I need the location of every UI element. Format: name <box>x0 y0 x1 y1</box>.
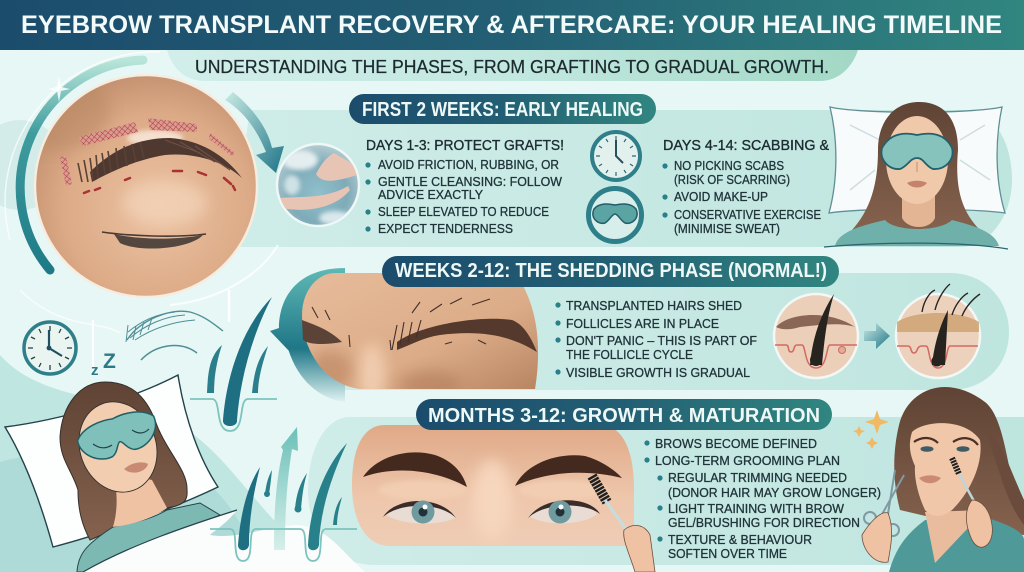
text block: days 1-3: GENTLE CLEANSING: FOLLOW <box>378 174 563 189</box>
pillow <box>5 375 218 547</box>
text block: growth bullets: (DONOR HAIR MAY GROW LONGER) <box>668 485 881 500</box>
brows and eyes <box>914 438 978 445</box>
text block: days 1-3: DAYS 1-3: PROTECT GRAFTS! <box>366 138 564 154</box>
closed eye <box>102 232 206 249</box>
arrow: to water circle <box>225 92 284 173</box>
lips <box>919 475 941 483</box>
illustration: hair regrowth with arrow <box>210 427 357 561</box>
text block: days 4-14: AVOID MAKE-UP <box>674 189 768 204</box>
blanket <box>83 510 365 572</box>
text block: shedding bullets <box>555 298 757 380</box>
text block: days 4-14: (MINIMISE SWEAT) <box>674 221 780 236</box>
text block: days 1-3: ADVICE EXACTLY <box>378 187 483 202</box>
photo: shedding brows <box>302 273 538 389</box>
icon: water and hands <box>277 144 360 226</box>
text block: days 4-14: NO PICKING SCABS <box>674 158 784 173</box>
wand and hand <box>592 476 655 572</box>
text block: growth bullets: SOFTEN OVER TIME <box>668 546 787 561</box>
icon: brow sketch <box>126 311 223 360</box>
illustration: hair follicle growth <box>190 297 277 431</box>
section heading: first 2 weeks: FIRST 2 WEEKS: EARLY HEALING <box>362 99 643 121</box>
icon: clock <box>592 132 640 180</box>
hair <box>852 102 980 230</box>
neck <box>112 470 167 527</box>
shirt <box>77 503 220 572</box>
brow <box>78 138 242 182</box>
timeline arcs around eye photo <box>5 52 278 372</box>
text block: growth bullets: LIGHT TRAINING WITH BROW <box>668 501 845 516</box>
lips <box>907 181 927 188</box>
diagram: follicle after <box>896 284 980 378</box>
panel: first 2 weeks background <box>230 110 1012 247</box>
section heading: first 2 weeks <box>349 94 656 124</box>
hair <box>894 387 1024 535</box>
text block: growth bullets: REGULAR TRIMMING NEEDED <box>668 470 847 485</box>
illustration: woman on pillow with mask <box>824 102 1008 249</box>
neck and face <box>902 190 935 227</box>
subtitle band <box>167 50 858 81</box>
text block: shedding bullets: THE FOLLICLE CYCLE <box>566 347 693 362</box>
illustration: woman grooming brows <box>862 387 1024 572</box>
text block: days 4-14: CONSERVATIVE EXERCISE <box>674 207 821 222</box>
pillow <box>829 107 1005 213</box>
sleep mask <box>74 406 162 466</box>
lips <box>124 462 148 473</box>
face <box>910 423 981 516</box>
background washes <box>0 120 330 572</box>
text block: days 1-3: SLEEP ELEVATED TO REDUCE <box>378 204 549 219</box>
shirt <box>889 517 1024 572</box>
text block: growth bullets: GEL/BRUSHING FOR DIRECTION <box>668 515 860 530</box>
zzz sleep letters <box>91 350 116 379</box>
crescent arrow <box>270 268 345 402</box>
panel: months 3-12 background <box>308 417 1024 565</box>
scissors <box>864 470 904 536</box>
text block: growth bullets: TEXTURE & BEHAVIOUR <box>668 532 812 547</box>
incision marks <box>84 171 235 193</box>
text block: days 4-14: (RISK OF SCARRING) <box>674 172 790 187</box>
text block: shedding bullets: TRANSPLANTED HAIRS SHED <box>566 298 742 313</box>
text block: growth bullets <box>644 436 881 561</box>
text block: shedding bullets: VISIBLE GROWTH IS GRADUAL <box>566 365 750 380</box>
icon: sleep mask <box>588 188 642 242</box>
icon: sparkles <box>853 410 889 449</box>
illustration: sleeping woman <box>5 375 365 572</box>
brow wand <box>952 458 959 474</box>
heading text: MONTHS 3-12: GROWTH & MATURATION <box>428 405 820 427</box>
text block: growth bullets: BROWS BECOME DEFINED <box>655 436 817 451</box>
text block: days 1-3: AVOID FRICTION, RUBBING, OR <box>378 157 559 172</box>
text block: shedding bullets: FOLLICLES ARE IN PLACE <box>566 316 719 331</box>
title banner <box>0 0 1024 50</box>
photo: mature brows <box>352 425 634 546</box>
arrow: before to after <box>864 323 890 349</box>
panel: weeks 2-12 background <box>330 273 1009 390</box>
text block: shedding bullets: DON'T PANIC – THIS IS PART OF <box>566 333 757 348</box>
left hand <box>862 513 892 562</box>
photo: grafted eyebrow <box>10 70 257 297</box>
hair <box>60 382 187 540</box>
hair front strand <box>985 430 1024 525</box>
icon: wall clock <box>24 322 76 374</box>
section heading: months 3-12 <box>352 399 832 572</box>
text block: days 4-14: DAYS 4-14: SCABBING & <box>663 138 829 154</box>
zzz sleep letters: Z <box>103 350 116 373</box>
face <box>67 391 169 503</box>
title: EYEBROW TRANSPLANT RECOVERY & AFTERCARE: YOUR HEALING TIMELINE <box>21 11 1002 39</box>
text block: days 1-3: EXPECT TENDERNESS <box>378 221 513 236</box>
graft patches <box>60 118 235 186</box>
text block: days 4-14 <box>662 138 829 236</box>
sleep mask <box>881 134 953 169</box>
text block: days 1-3 <box>365 138 564 236</box>
heading text: WEEKS 2-12: THE SHEDDING PHASE (NORMAL!) <box>395 260 827 282</box>
eyelashes <box>93 429 149 448</box>
section heading: weeks 2-12 <box>270 256 839 407</box>
text block: growth bullets: LONG-TERM GROOMING PLAN <box>655 453 840 468</box>
neck opening <box>925 510 985 563</box>
subtitle: UNDERSTANDING THE PHASES, FROM GRAFTING TO GRADUAL GROWTH. <box>195 57 829 77</box>
zzz sleep letters: z <box>91 362 98 379</box>
right hand <box>966 500 992 547</box>
surface line <box>824 243 1008 249</box>
growth arrow <box>274 427 298 550</box>
shirt <box>835 220 999 246</box>
diagram: follicle before <box>774 294 858 378</box>
